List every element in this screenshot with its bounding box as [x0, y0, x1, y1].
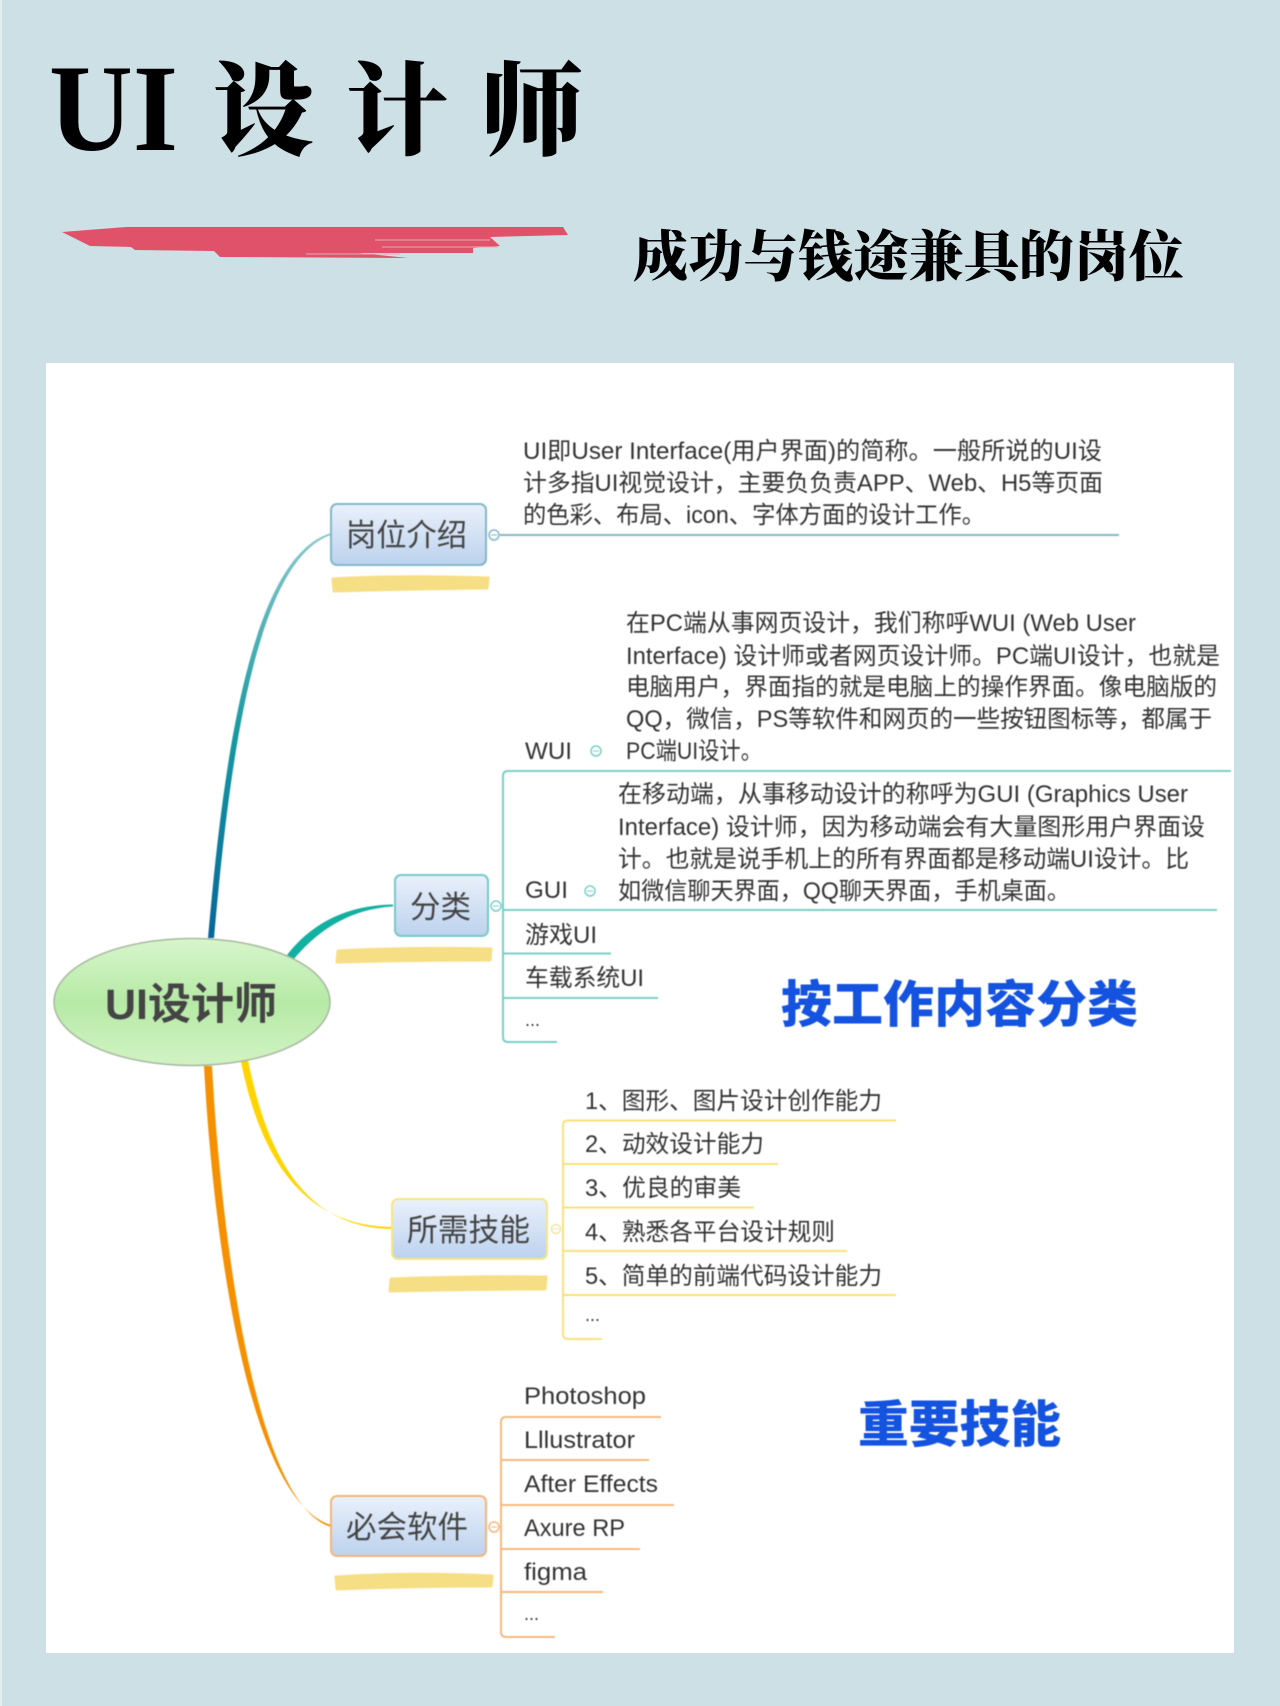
branch: 分类: [337, 610, 1231, 1042]
branch: 必会软件: [331, 1383, 674, 1637]
node box: 必会软件: 必会软件: [346, 1510, 468, 1545]
software list: ...: [524, 1604, 539, 1624]
collapse marker: [491, 901, 501, 911]
node box: 岗位介绍: 岗位介绍: [346, 518, 467, 553]
node box: 必会软件: [331, 1496, 486, 1556]
GUI item: 如微信聊天界面，QQ聊天界面，手机桌面。: [618, 878, 1070, 905]
collapse marker: [489, 530, 499, 540]
title: [49, 40, 583, 177]
bracket lines: [501, 1417, 674, 1637]
node box: 分类: 分类: [410, 890, 471, 925]
description text: 计多指UI视觉设计，主要负负责APP、Web、H5等页面: [523, 470, 1103, 497]
GUI item: 在移动端，从事移动设计的称呼为GUI (Graphics User: [618, 781, 1188, 808]
skills list: ...: [585, 1305, 600, 1325]
branch: 所需技能: [390, 1088, 896, 1339]
yellow highlight: [390, 1277, 546, 1291]
item: ellipsis: ...: [525, 1010, 540, 1030]
WUI item: PC端UI设计。: [626, 738, 762, 765]
description text: UI即User Interface(用户界面)的简称。一般所说的UI设: [523, 438, 1102, 465]
title: 设: [212, 57, 314, 170]
item: 游戏UI: 游戏UI: [525, 922, 597, 949]
skills list: 5、简单的前端代码设计能力: [585, 1263, 882, 1290]
description text: 的色彩、布局、icon、字体方面的设计工作。: [523, 502, 985, 529]
node box: 岗位介绍: [331, 504, 486, 565]
connector: centre to 岗位介绍: [208, 533, 331, 938]
connector: centre to 必会软件: [204, 1066, 331, 1527]
WUI item: [525, 610, 1220, 765]
title: 计: [346, 57, 448, 170]
item: 车载系统UI: 车载系统UI: [525, 965, 644, 992]
yellow highlight: [336, 1574, 492, 1589]
skills list: 3、优良的审美: [585, 1175, 741, 1202]
node box: 分类: [395, 875, 488, 936]
title: UI: [49, 40, 178, 177]
collapse marker: [552, 1224, 560, 1234]
software list: Photoshop: [524, 1383, 646, 1410]
skills list: 4、熟悉各平台设计规则: [585, 1219, 835, 1246]
software list: Axure RP: [524, 1515, 625, 1542]
title: 师: [481, 57, 583, 170]
skills list: 2、动效设计能力: [585, 1131, 764, 1158]
GUI item: 计。也就是说手机上的所有界面都是移动端UI设计。比: [618, 846, 1189, 873]
skills list: [585, 1088, 882, 1325]
collapse marker: [489, 1522, 499, 1532]
central node: UI设计师: [105, 981, 277, 1029]
annotation: 按工作内容分类: 按工作内容分类: [781, 977, 1138, 1033]
WUI item: 电脑用户，界面指的就是电脑上的操作界面。像电脑版的: [626, 674, 1217, 701]
WUI item: QQ，微信，PS等软件和网页的一些按钮图标等，都属于: [626, 706, 1212, 733]
bracket lines: [503, 771, 1231, 1042]
software list: figma: [524, 1559, 588, 1586]
WUI item: 在PC端从事网页设计，我们称呼WUI (Web User: [626, 610, 1136, 637]
connector: centre to 分类: [287, 904, 393, 960]
node box: 所需技能: [392, 1199, 547, 1259]
GUI item: [525, 781, 1205, 905]
connector: centre to 所需技能: [241, 1060, 392, 1229]
GUI item: Interface) 设计师，因为移动端会有大量图形用户界面设: [618, 814, 1205, 841]
description text: [523, 438, 1103, 529]
software list: After Effects: [524, 1471, 658, 1498]
WUI item: WUI: [525, 738, 572, 765]
software list: Lllustrator: [524, 1427, 635, 1454]
bracket lines: [563, 1120, 896, 1339]
panel: mind map: [46, 363, 1234, 1653]
annotation: 重要技能: 重要技能: [858, 1397, 1061, 1453]
skills list: 1、图形、图片设计创作能力: [585, 1088, 882, 1115]
central node: [54, 938, 330, 1066]
software list: [524, 1383, 658, 1624]
WUI item: Interface) 设计师或者网页设计师。PC端UI设计，也就是: [626, 643, 1220, 670]
GUI item: GUI: [525, 877, 568, 904]
yellow highlight: [337, 948, 491, 962]
description line: [500, 534, 1119, 536]
subtitle: 成功与钱途兼具的岗位: [633, 227, 1184, 288]
node box: 所需技能: 所需技能: [407, 1213, 530, 1248]
red brush stroke: [62, 227, 568, 258]
yellow highlight: [333, 577, 488, 591]
branch: 岗位介绍: [331, 438, 1119, 591]
